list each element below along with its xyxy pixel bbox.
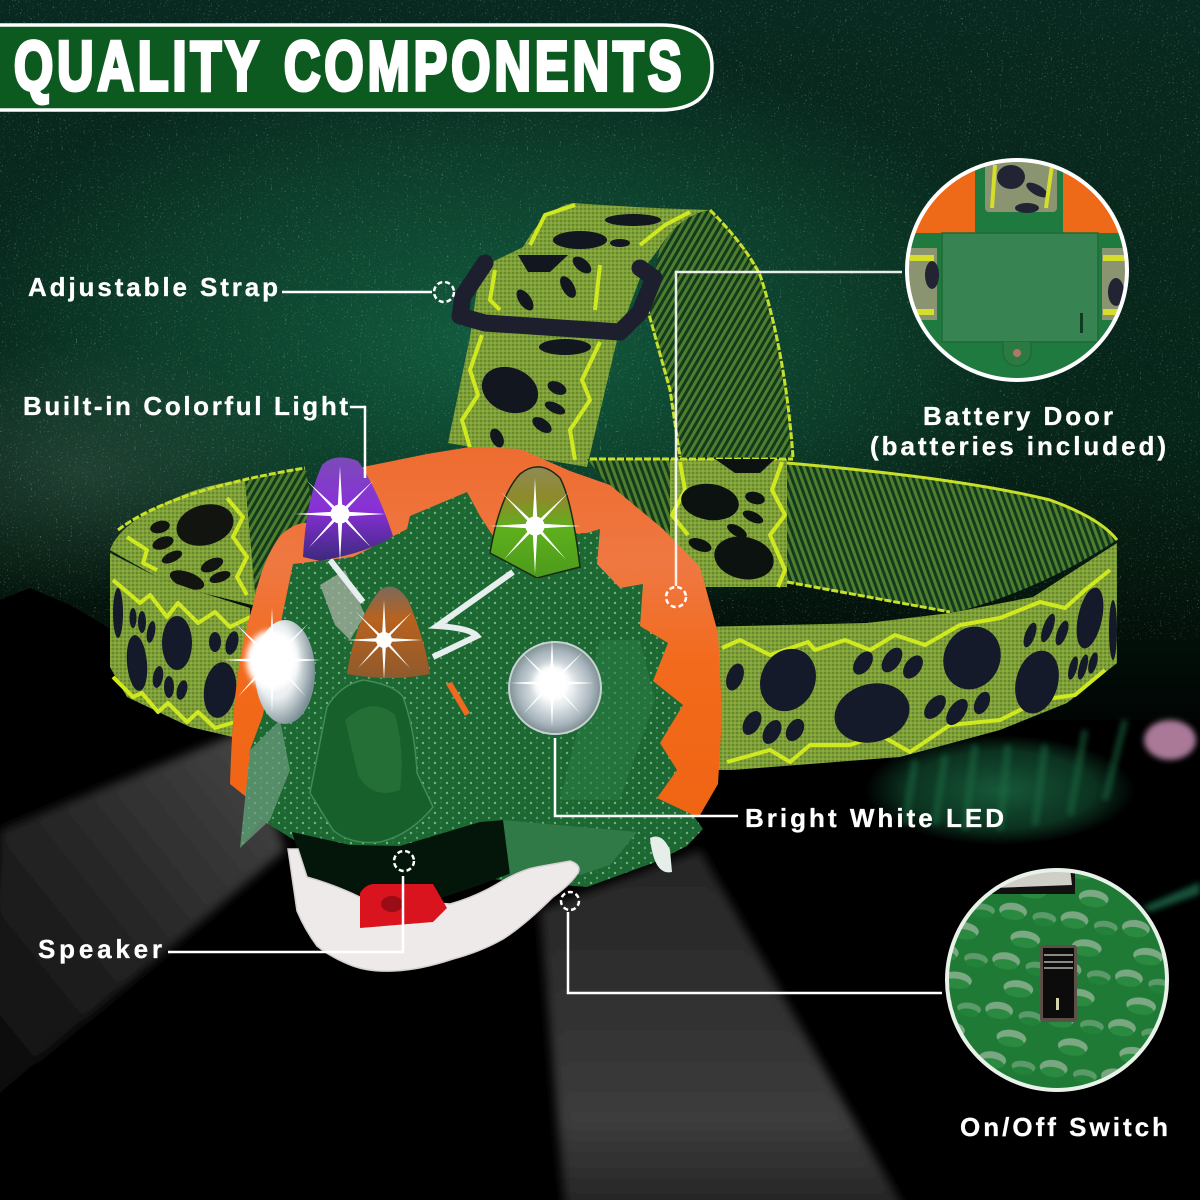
orange frill bbox=[230, 447, 722, 840]
lower right jaw plate bbox=[503, 820, 637, 875]
label: on/off switch: On/Off Switch bbox=[960, 1112, 1168, 1142]
light beams bbox=[0, 730, 905, 1200]
strap buckle bbox=[460, 263, 654, 332]
jaw / mouth bbox=[288, 849, 579, 971]
label: battery door: Battery Door bbox=[923, 401, 1113, 431]
purple light bbox=[303, 457, 393, 561]
mountains silhouette bbox=[0, 588, 1200, 1200]
title: components: COMPONENTS bbox=[284, 27, 681, 105]
green light bbox=[490, 467, 580, 578]
callout: speaker bbox=[38, 851, 414, 964]
lighter scale patches bbox=[320, 570, 365, 640]
red speaker bbox=[360, 884, 447, 928]
rear loop inner twill bbox=[647, 210, 793, 457]
dinosaur head bbox=[223, 447, 722, 971]
callout: adjustable strap bbox=[28, 272, 454, 302]
orange slit bbox=[446, 682, 470, 716]
inset: battery door bbox=[905, 158, 1133, 380]
headband: left side bbox=[110, 468, 320, 740]
callout: built-in colorful light: Built-in Colorful Light bbox=[23, 391, 348, 421]
callout: bright white LED bbox=[555, 738, 1004, 833]
dark mouth cavity bbox=[292, 820, 540, 905]
callout: battery door bbox=[666, 158, 1166, 607]
left white LED bbox=[255, 620, 315, 724]
inset: on/off switch bbox=[940, 865, 1180, 1095]
title: quality: QUALITY bbox=[14, 27, 259, 105]
rear loop outer pattern bbox=[448, 203, 710, 467]
adjustable strap: rear loop bbox=[448, 203, 793, 587]
green face bbox=[240, 492, 703, 887]
orange light bbox=[347, 587, 430, 678]
label: batteries included: (batteries included) bbox=[870, 431, 1166, 461]
right white LED bbox=[509, 642, 601, 734]
callout: speaker: Speaker bbox=[38, 934, 162, 964]
snout bbox=[310, 680, 433, 842]
centre strap patch bbox=[587, 459, 670, 560]
headband: right side bbox=[700, 463, 1117, 770]
callout: adjustable strap: Adjustable Strap bbox=[28, 272, 278, 302]
callout: built-in colorful light bbox=[23, 391, 365, 478]
white wires bbox=[330, 560, 513, 657]
white tusk bbox=[650, 836, 672, 872]
right-side foliage bbox=[865, 720, 1200, 912]
title banner bbox=[0, 25, 712, 110]
callout: on/off switch bbox=[561, 865, 1180, 1142]
callout: bright white LED: Bright White LED bbox=[745, 803, 1004, 833]
